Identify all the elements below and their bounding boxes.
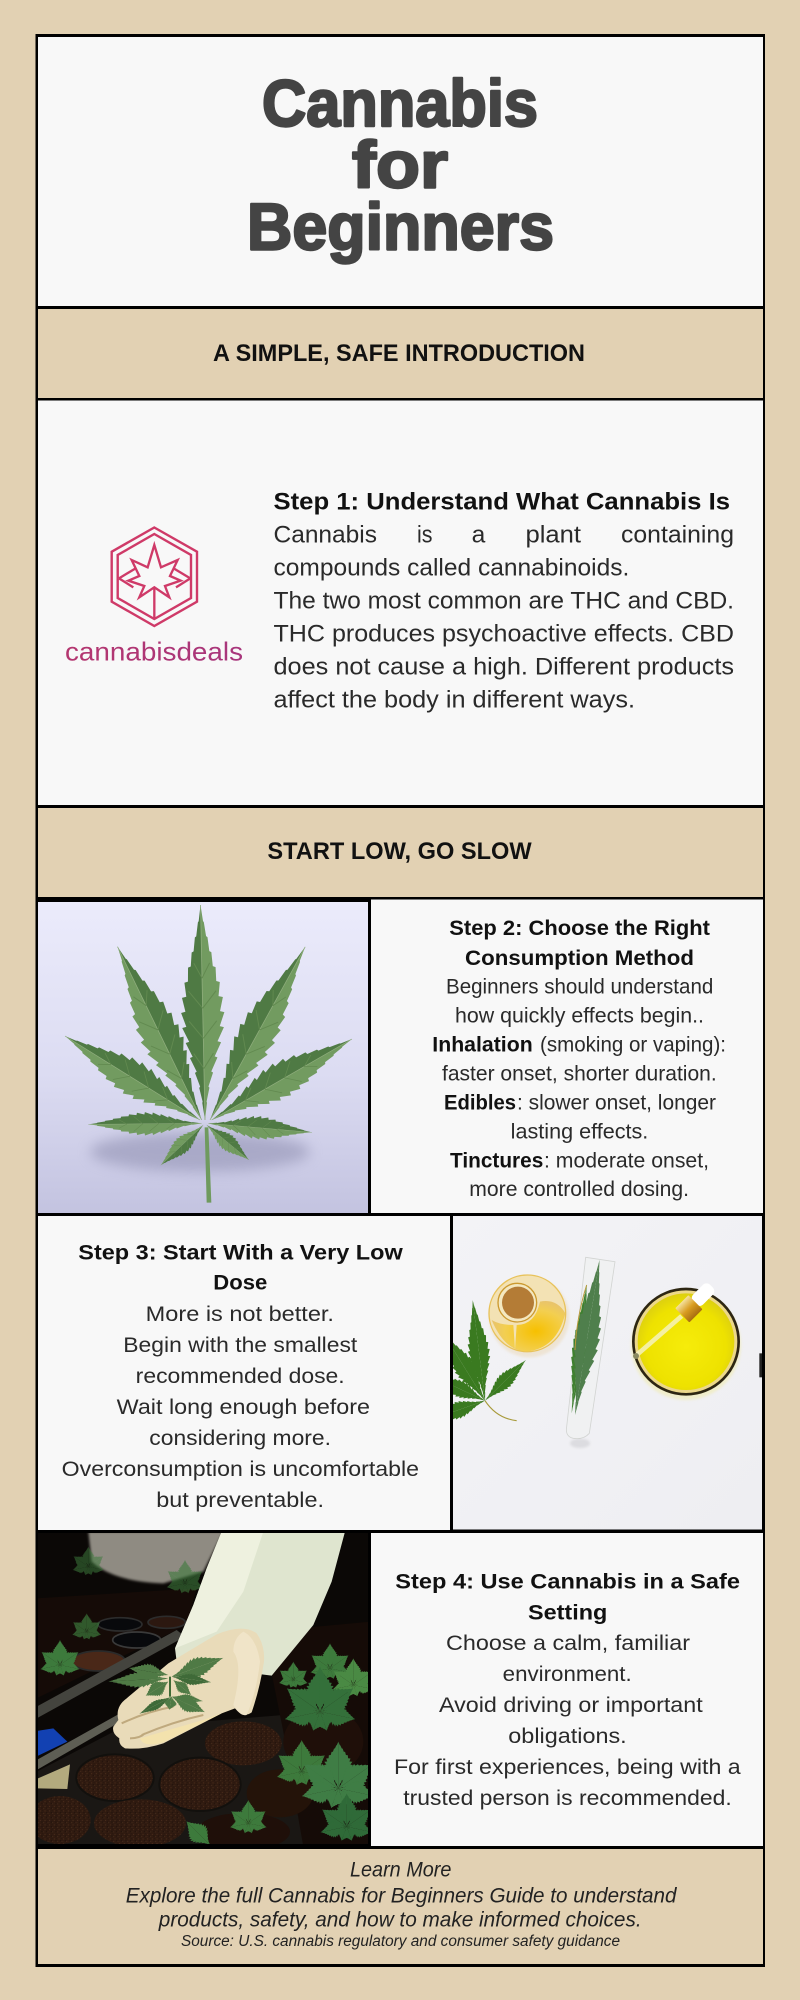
footer call to action: products, safety, and how to make informed choices. — [158, 1908, 642, 1931]
panel: footer — [38, 1849, 763, 1964]
step 2 heading: Step 2: Choose the Right — [449, 917, 710, 940]
step 2 body text: faster onset, shorter duration. — [442, 1062, 717, 1085]
lower tray and soil pots — [38, 1716, 303, 1844]
small leaf — [453, 1300, 526, 1420]
step 2 body text: : moderate onset, — [544, 1149, 709, 1172]
title: Beginners — [247, 190, 554, 264]
step 2 body text: (smoking or vaping): — [540, 1034, 726, 1057]
step 2 body text: lasting effects. — [511, 1120, 648, 1143]
logo: cannabisdeals — [65, 528, 243, 666]
step 2 body text: Inhalation — [432, 1034, 533, 1057]
title — [247, 66, 554, 264]
photo: cannabis leaf — [38, 902, 368, 1213]
panel: step 2 — [371, 900, 763, 1213]
step 3 heading: Step 3: Start With a Very Low — [78, 1241, 403, 1264]
source note: Source: U.S. cannabis regulatory and consumer safety guidance — [181, 1933, 620, 1950]
step 3 body text: Wait long enough before — [117, 1396, 370, 1419]
step 3 body text: considering more. — [149, 1427, 331, 1450]
step 4 heading: Setting — [528, 1601, 607, 1624]
footer call to action: Explore the full Cannabis for Beginners Guide to understand — [126, 1884, 678, 1907]
panel: step 3 — [38, 1216, 450, 1530]
step 4 body text: trusted person is recommended. — [403, 1787, 732, 1810]
gloved hand — [113, 1629, 264, 1749]
footer call to action — [126, 1859, 678, 1931]
step 1 heading: Step 1: Understand What Cannabis Is — [274, 488, 730, 515]
petri dish of oil — [630, 1314, 742, 1401]
panel: subtitle band — [38, 309, 763, 398]
photo: gloved hand holding seedling — [29, 1532, 380, 1853]
icon: hexagon leaf emblem — [112, 528, 197, 626]
step 4 body text: Avoid driving or important — [439, 1694, 703, 1717]
upper tray — [37, 1588, 197, 1698]
step 1 body text: does not cause a high. Different products — [274, 653, 734, 680]
seedling on hand — [108, 1656, 224, 1714]
step 1 body text: containing — [621, 521, 734, 548]
step 3 body text: but preventable. — [156, 1489, 324, 1512]
step 3 heading — [78, 1241, 403, 1295]
step 2 body text: Edibles — [444, 1091, 516, 1114]
small jar — [489, 1277, 569, 1357]
step 3 body text: recommended dose. — [136, 1365, 345, 1388]
step 2 body text — [432, 975, 726, 1201]
heading: start low, go slow: START LOW, GO SLOW — [267, 838, 532, 865]
step 1 body text: plant — [526, 521, 581, 548]
step 1 body text — [274, 521, 734, 713]
step 1 body text: is — [417, 521, 432, 548]
step 1 body text: compounds called cannabinoids. — [274, 554, 629, 581]
photo: oils and cannabis leaves — [427, 1216, 763, 1530]
step 4 heading — [395, 1570, 740, 1624]
step 3 body text: More is not better. — [146, 1303, 334, 1326]
background seedlings — [37, 1547, 380, 1853]
step 2 heading — [449, 917, 710, 970]
step 2 body text: Beginners should understand — [446, 975, 713, 998]
panel: start low band — [38, 808, 763, 897]
step 2 body text: more controlled dosing. — [469, 1178, 689, 1201]
step 3 heading: Dose — [213, 1272, 267, 1295]
step 4 body text: environment. — [503, 1663, 632, 1686]
heading: a simple, safe introduction: A SIMPLE, SAFE INTRODUCTION — [213, 340, 585, 367]
step 2 body text: how quickly effects begin.. — [455, 1005, 704, 1028]
step 1 body text: affect the body in different ways. — [274, 686, 635, 713]
step 4 body text — [394, 1632, 741, 1810]
panel: title — [38, 37, 763, 306]
dropper — [637, 1316, 682, 1355]
step 1 body text: The two most common are THC and CBD. — [274, 587, 734, 614]
step 2 heading: Consumption Method — [465, 947, 694, 970]
step 1 body text: THC produces psychoactive effects. CBD — [274, 620, 734, 647]
step 1 body text: a — [472, 521, 486, 548]
title: Cannabis — [262, 66, 538, 140]
test tube — [570, 1439, 590, 1448]
logo wordmark: cannabisdeals — [65, 636, 243, 666]
title: for — [352, 128, 448, 202]
step 3 body text — [62, 1303, 419, 1512]
step 2 body text: : slower onset, longer — [517, 1091, 716, 1114]
blurred background figure — [88, 1532, 223, 1583]
step 1 body text: Cannabis — [274, 521, 377, 548]
step 4 body text: Choose a calm, familiar — [446, 1632, 690, 1655]
step 4 body text: obligations. — [508, 1725, 627, 1748]
step 3 body text: Overconsumption is uncomfortable — [62, 1458, 419, 1481]
footer call to action: Learn More — [350, 1859, 451, 1882]
step 3 body text: Begin with the smallest — [123, 1334, 357, 1357]
step 4 body text: For first experiences, being with a — [394, 1756, 741, 1779]
step 2 body text: Tinctures — [450, 1149, 543, 1172]
panel: step 4 — [371, 1533, 763, 1846]
lab coat sleeve — [175, 1532, 345, 1676]
step 4 heading: Step 4: Use Cannabis in a Safe — [395, 1570, 740, 1593]
panel: step 1 — [38, 400, 763, 805]
